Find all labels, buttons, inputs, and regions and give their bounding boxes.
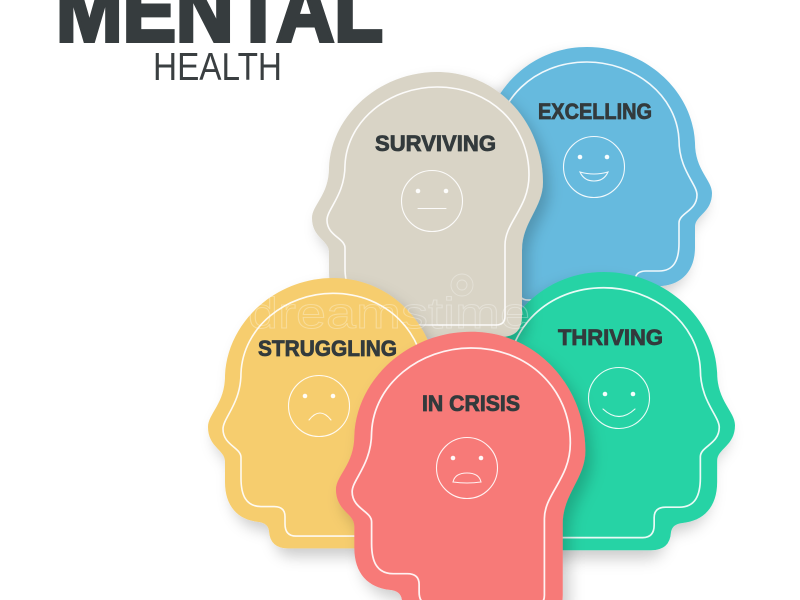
icon: laughing face	[564, 136, 624, 198]
label: surviving: SURVIVING	[375, 131, 496, 156]
watermark	[248, 274, 530, 338]
icon: neutral face	[402, 170, 462, 232]
watermark: dreamstime	[248, 289, 530, 338]
panel: surviving head	[312, 72, 543, 337]
panel: thriving head	[492, 272, 735, 550]
label: excelling: EXCELLING	[538, 99, 652, 124]
subtitle: HEALTH: HEALTH	[153, 46, 282, 89]
icon: sad face	[288, 376, 350, 436]
label: in crisis: IN CRISIS	[422, 391, 520, 416]
icon: smiling face	[588, 368, 650, 428]
panel: excelling head	[481, 47, 712, 312]
icon: distressed face	[436, 438, 498, 498]
label: struggling: STRUGGLING	[258, 336, 397, 361]
panel: struggling head	[208, 278, 439, 548]
label: thriving: THRIVING	[558, 325, 663, 350]
panel: in crisis head	[336, 332, 585, 600]
